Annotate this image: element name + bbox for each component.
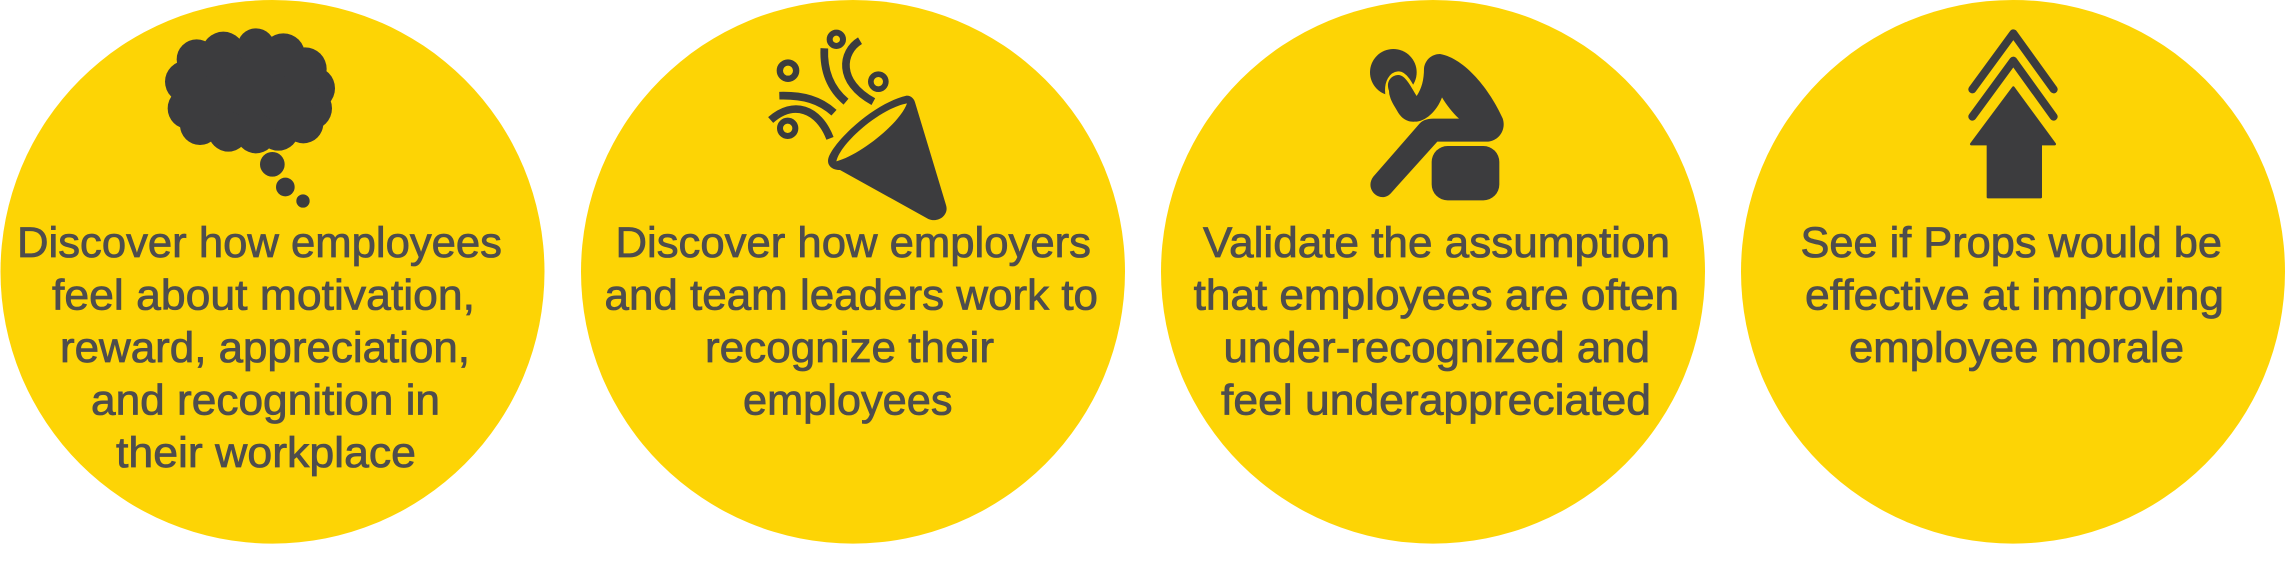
text: discover employer practice: recognize their [705,324,994,372]
text: props effectiveness: effective at improving [1805,272,2224,320]
text: validate assumption: feel underappreciated [1221,376,1651,424]
text: discover employee feelings: and recognition in [91,376,440,424]
panel: discover employer practice [581,0,1125,544]
yellow circle 4 [1741,0,2285,544]
text: validate assumption: under-recognized and [1224,324,1650,372]
text: props effectiveness: employee morale [1849,324,2184,372]
text: props effectiveness [1800,219,2224,372]
panel: props effectiveness [1741,0,2285,544]
icon: thought bubble [165,28,335,208]
icon: upward arrow with chevrons [1971,33,2055,197]
yellow circle 1 [0,0,544,544]
text: discover employer practice: employees [743,376,952,424]
panel: discover employee feelings [0,0,544,544]
text: discover employer practice: and team leaders work to [604,272,1098,320]
text: validate assumption: Validate the assumption [1203,219,1670,267]
text: discover employer practice [604,219,1098,424]
text: discover employee feelings: Discover how employees [17,219,502,267]
text: discover employee feelings: their workplace [116,429,416,477]
text: discover employee feelings [17,219,502,477]
text: discover employee feelings: feel about motivation, [52,272,475,320]
text: props effectiveness: See if Props would be [1800,219,2222,267]
text: discover employer practice: Discover how employers [616,219,1091,267]
panel: validate assumption [1161,0,1705,544]
icon: party popper [771,33,947,220]
text: validate assumption [1194,219,1679,424]
icon: dejected seated person [1370,49,1504,200]
text: discover employee feelings: reward, appreciation, [60,324,470,372]
text: validate assumption: that employees are often [1194,272,1679,320]
yellow circle 3 [1161,0,1705,544]
yellow circle 2 [581,0,1125,544]
